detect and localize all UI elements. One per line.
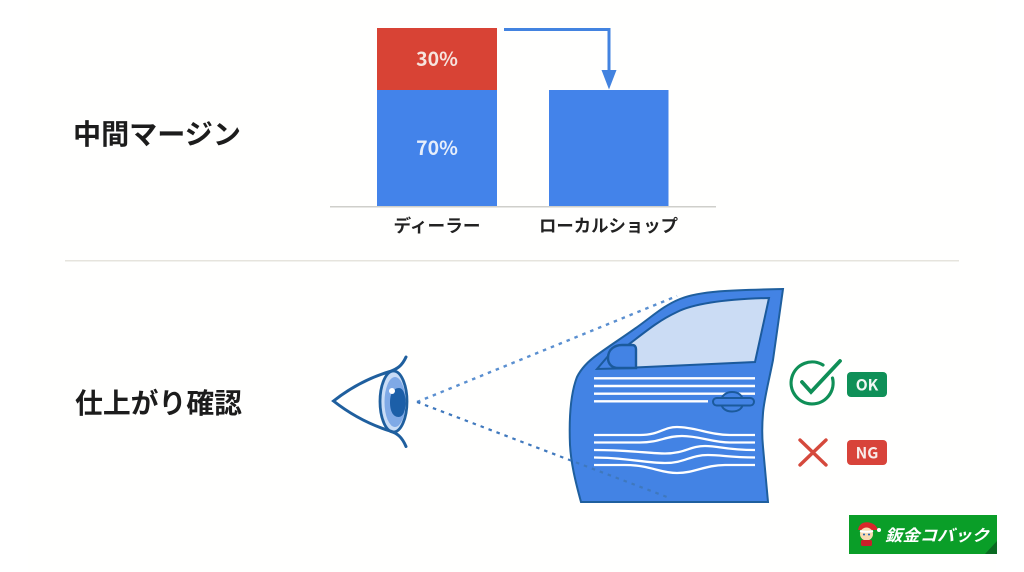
icon: eye: [334, 357, 407, 446]
bar: dealer margin 30%: [377, 28, 497, 90]
panel: bar chart: [330, 28, 716, 236]
badge: OK: OK: [856, 374, 879, 396]
side mirror: [608, 345, 636, 368]
bar: dealer margin 30%: 30%: [416, 43, 458, 72]
icon: cross mark: [800, 440, 826, 465]
window corner: [597, 355, 636, 369]
label: local shop: ローカルショップ: [539, 216, 678, 236]
heading: 中間マージン: 中間マージン: [73, 119, 241, 150]
icon: car door: [570, 289, 783, 502]
straight reflection lines: OK: [594, 378, 755, 401]
bar: local shop: [549, 90, 668, 206]
label: dealer: ディーラー: [394, 216, 480, 236]
bar: dealer base 70%: [377, 90, 497, 206]
icon: check mark: [791, 361, 840, 404]
logo mascot: [858, 522, 881, 546]
badge: NG: [847, 440, 887, 465]
axis line: [330, 206, 716, 208]
sight line: upper: [417, 296, 677, 402]
logo text: 鈑金コバック: [885, 527, 990, 545]
logo: 鈑金コバック: [849, 515, 997, 554]
door window: [628, 298, 769, 368]
door handle: [713, 392, 754, 412]
badge: NG: NG: [856, 442, 878, 464]
badge: OK: [847, 372, 887, 397]
sight line: lower: [417, 402, 667, 497]
arrow: margin removed: [504, 30, 616, 90]
bar: dealer base 70%: 70%: [416, 132, 458, 161]
wavy reflection lines: NG: [594, 427, 755, 473]
heading: 仕上がり確認: 仕上がり確認: [75, 387, 242, 419]
